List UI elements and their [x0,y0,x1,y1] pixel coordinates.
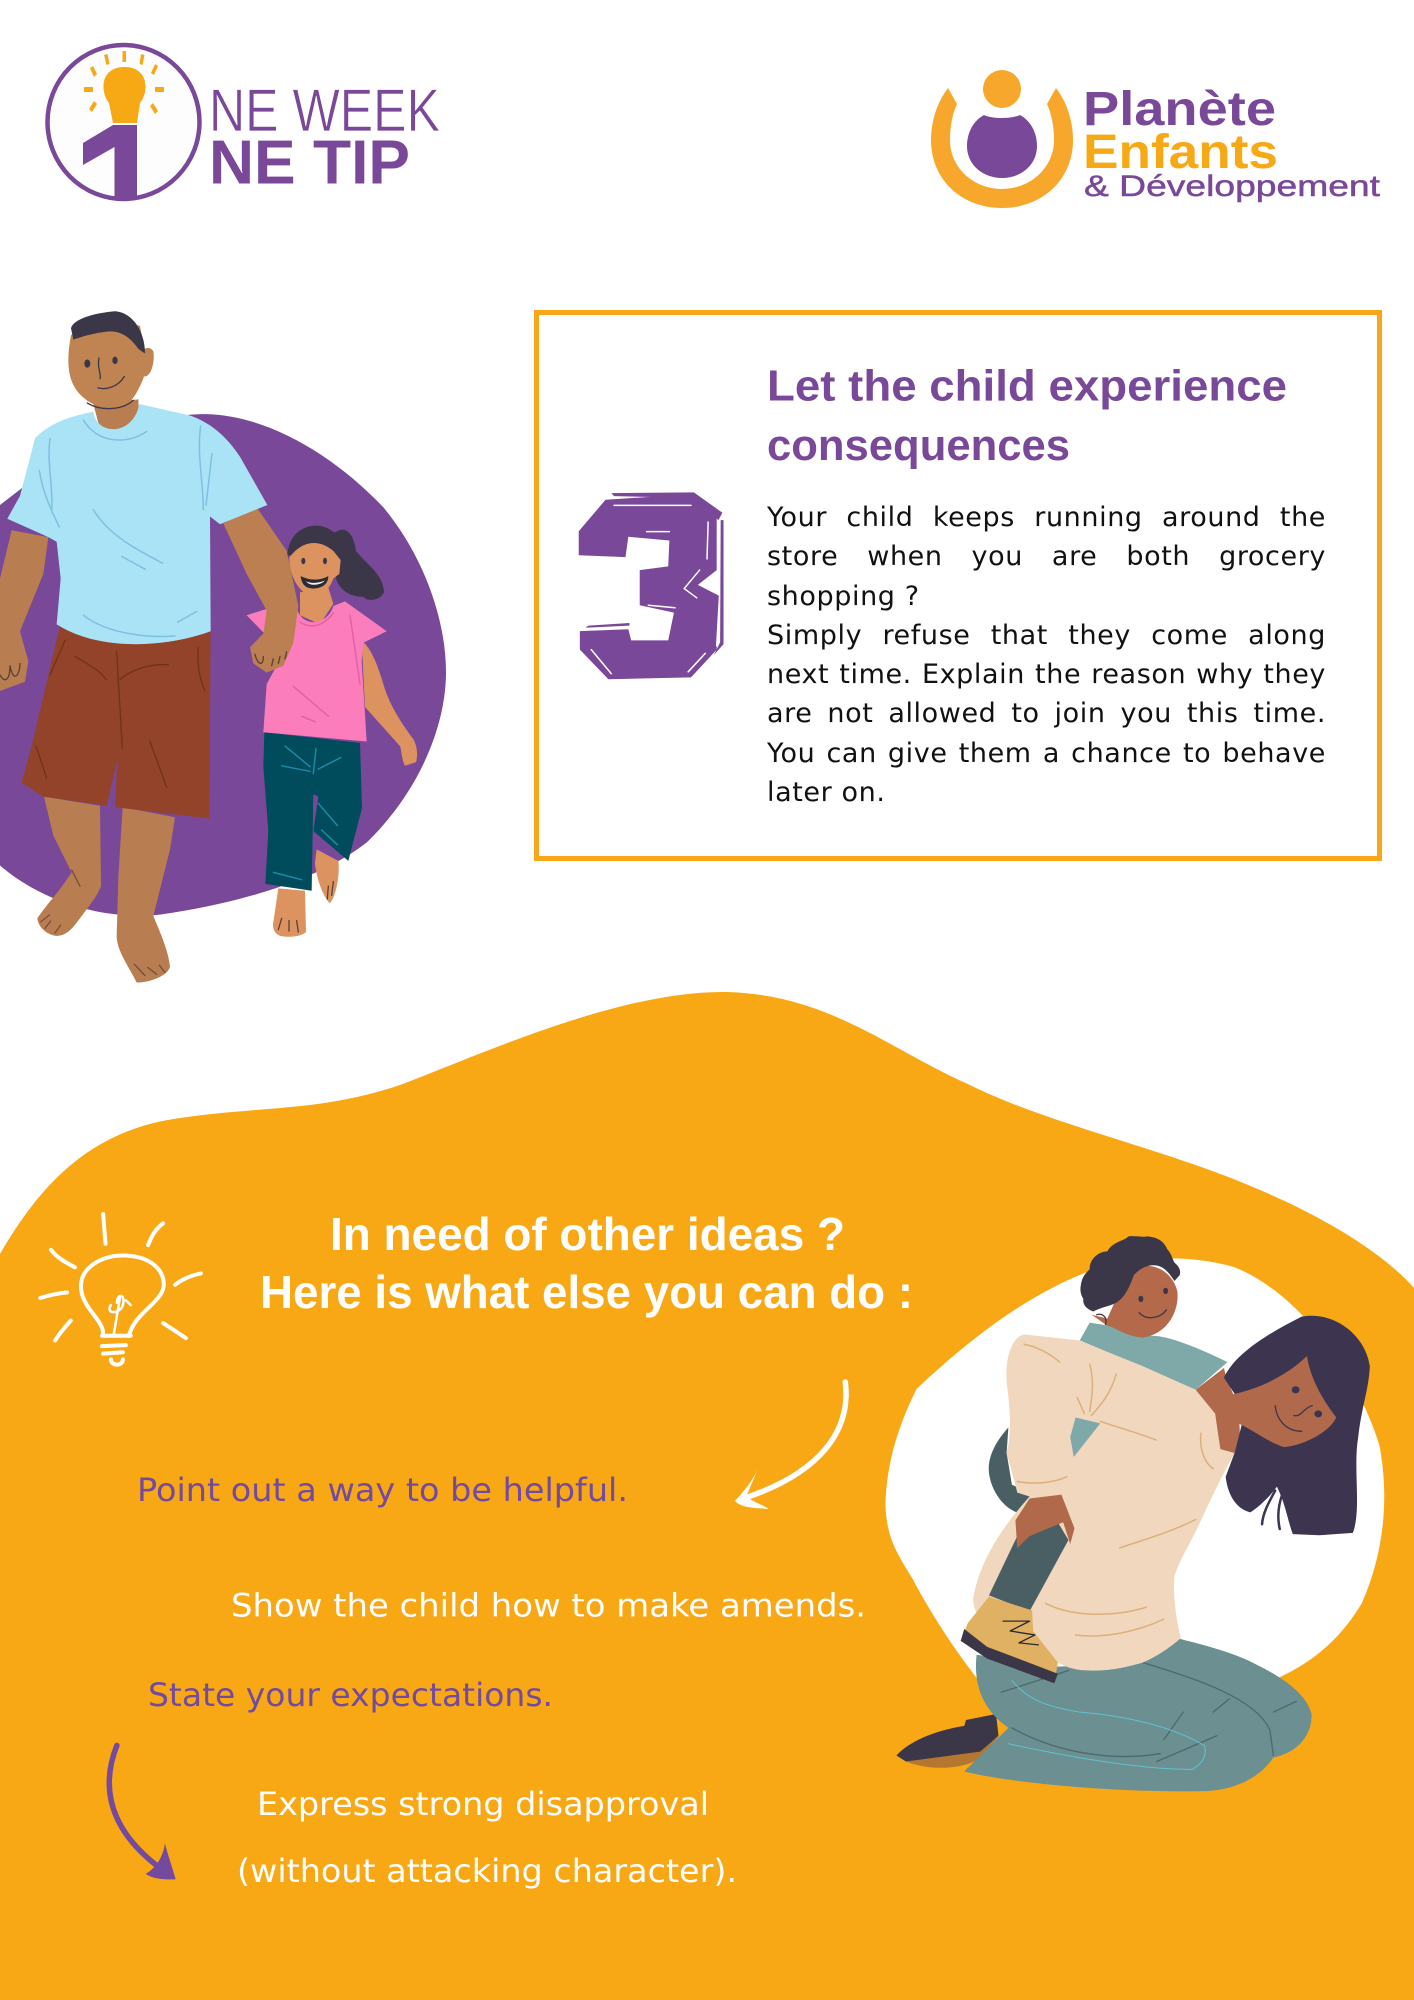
illustration: mother carrying child [885,1236,1384,1791]
heading: other ideas: Here is what else you can do : [260,1266,913,1318]
logo text: enfants: Enfants [1083,126,1278,179]
mother hair [1224,1316,1370,1535]
white blob [885,1258,1384,1682]
text block: tip body: are not allowed to join you this time. [767,698,1326,729]
logo text: planete: Planète [1083,83,1276,136]
icon: orange head [983,70,1021,108]
child shirt [1080,1323,1227,1390]
child leg [989,1522,1068,1611]
child arm around neck [1196,1368,1240,1453]
icon: purple circle [967,115,1037,178]
text block: tip body: Simply refuse that they come along [767,620,1326,651]
girl [247,526,417,937]
heading: other ideas: In need of other ideas ? [330,1208,845,1260]
icon: logo numeral one [83,125,137,198]
icon: large numeral 3 [579,492,724,679]
logo: Planete Enfants et Developpement [931,70,1381,208]
tip: show how to make amends: Show the child how to make amends. [231,1586,866,1624]
text block: tip body: later on. [767,777,886,808]
child near leg behind [989,1427,1033,1512]
man [0,311,298,983]
icon: white light bulb [40,1214,201,1365]
child boot [961,1597,1058,1683]
mother hand [1015,1495,1074,1548]
text block: tip body [767,502,1326,808]
mother face [1231,1356,1336,1447]
heading: other ideas [260,1208,913,1318]
jeans [964,1639,1312,1791]
illustration: father and daughter on purple blob [0,311,446,983]
logo text: developpement: & Développement [1084,170,1381,203]
text block: tip body: next time. Explain the reason why they [767,659,1326,690]
arrow: white curved arrow [735,1382,846,1509]
heading: tip title [767,362,1287,470]
sweater [973,1334,1235,1671]
text block: tip body: store when you are both grocery [767,541,1326,572]
tip: state expectations: State your expectations. [148,1676,553,1714]
tip: express disapproval [237,1785,737,1890]
purple blob [0,414,446,916]
icon: logo light bulb [84,51,164,123]
tip: point out a way: Point out a way to be helpful. [137,1471,628,1509]
icon: orange ring [931,88,1073,208]
tip: express disapproval: Express strong disapproval [257,1785,709,1823]
text block: tip body: shopping ? [767,581,920,612]
panel: tip card border [536,312,1380,858]
orange wave background [0,992,1414,2000]
arrow: purple curved arrow [109,1745,176,1879]
back shoe [906,1736,1000,1768]
heading: tip title: Let the child experience [767,362,1287,410]
logo text: ne tip: NE TIP [209,128,410,198]
child head [1091,1266,1178,1338]
text block: tip body: Your child keeps running around the [767,502,1326,533]
logo: One Week One Tip [48,45,440,199]
icon: logo circle [48,45,200,199]
heading: tip title: consequences [767,421,1070,470]
logo text: ne week: NE WEEK [209,77,440,144]
text block: tip body: You can give them a chance to behave [767,738,1326,769]
tip: express disapproval: (without attacking character). [237,1852,737,1890]
